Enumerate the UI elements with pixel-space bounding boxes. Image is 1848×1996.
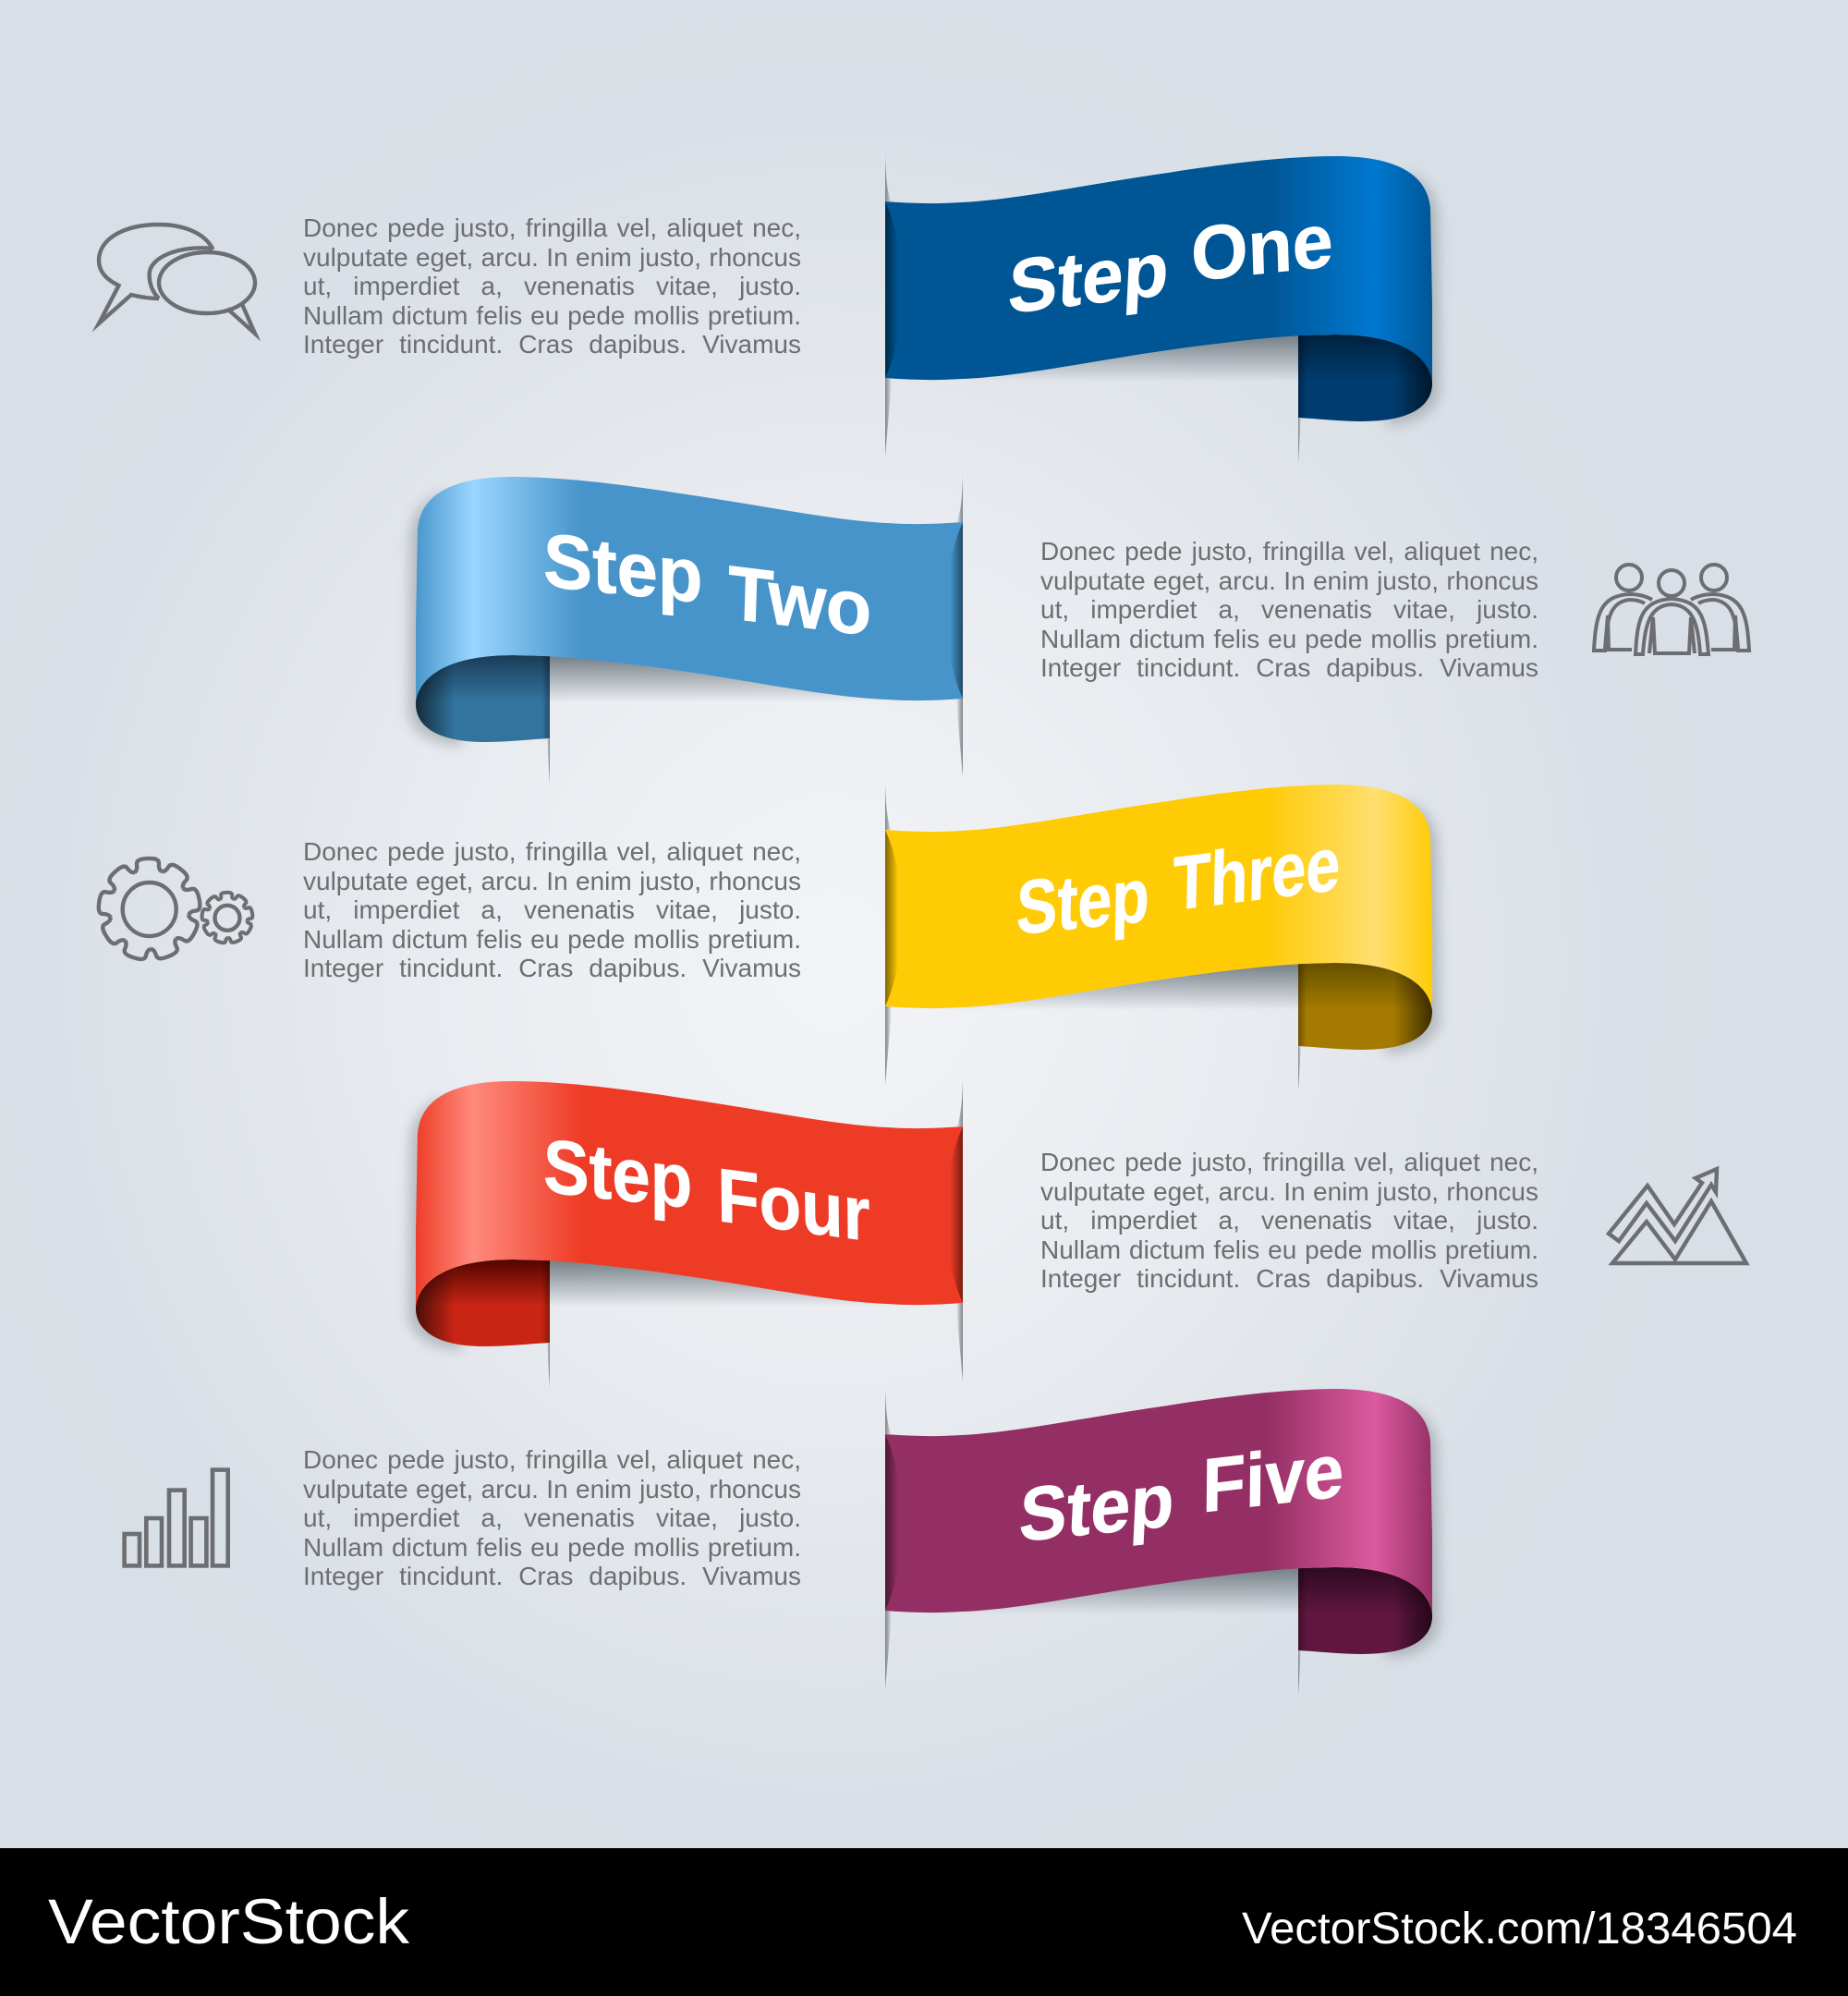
text block: step five: Nullam dictum felis eu pede mollis pretium.: [303, 1532, 801, 1562]
text block: step one: Integer tincidunt. Cras dapibus. Vivamus: [303, 330, 801, 359]
ribbon label: Step One: One: [1190, 198, 1334, 298]
text block: step one: Nullam dictum felis eu pede mollis pretium.: [303, 301, 801, 329]
text block: step four: ut, imperdiet a, venenatis vitae, justo.: [1040, 1206, 1538, 1235]
icon: gears: [97, 858, 253, 962]
icon: mountain chart with arrow: [1609, 1169, 1746, 1263]
text block: step two: Nullam dictum felis eu pede mollis pretium.: [1040, 625, 1538, 652]
text block: step one: vulputate eget, arcu. In enim justo, rhoncus: [303, 242, 801, 272]
text block: step five: Integer tincidunt. Cras dapibus. Vivamus: [303, 1562, 801, 1590]
icon: team of people: [1594, 565, 1749, 654]
text block: step four: Integer tincidunt. Cras dapibus. Vivamus: [1040, 1264, 1538, 1293]
text block: step three: Donec pede justo, fringilla vel, aliquet nec,: [303, 837, 801, 866]
footer bar: [0, 1848, 1848, 1996]
ribbon label: Step Three: Three: [1173, 821, 1341, 927]
text block: step five: vulputate eget, arcu. In enim justo, rhoncus: [303, 1475, 801, 1503]
text block: step five: ut, imperdiet a, venenatis vitae, justo.: [303, 1503, 801, 1532]
text block: step five: [303, 1445, 801, 1590]
ribbon label: Step Five: Step: [1017, 1457, 1176, 1557]
text block: step two: Donec pede justo, fringilla vel, aliquet nec,: [1040, 537, 1538, 566]
text block: step four: Nullam dictum felis eu pede mollis pretium.: [1040, 1235, 1538, 1264]
ribbon label: Step Four: Step: [543, 1123, 692, 1224]
icon: bar chart: [125, 1470, 228, 1565]
ribbon: step three: [885, 782, 1440, 1091]
text block: step four: [1040, 1148, 1538, 1293]
ribbon label: Step Four: Four: [717, 1152, 870, 1258]
ribbon label: Step Two: Step: [543, 517, 702, 619]
ribbon label: Step Three: Step: [1015, 852, 1150, 951]
text block: step four: Donec pede justo, fringilla vel, aliquet nec,: [1040, 1148, 1538, 1176]
footer url: VectorStock.com/18346504: [1242, 1905, 1797, 1953]
ribbon label: Step Two: Two: [726, 551, 873, 652]
text block: step two: vulputate eget, arcu. In enim justo, rhoncus: [1040, 566, 1538, 595]
ribbon label: Step One: Step: [1006, 226, 1171, 330]
footer brand: VectorStock: [48, 1886, 410, 1957]
ribbon label: Step Five: Five: [1202, 1427, 1344, 1528]
ribbon: step one: [885, 153, 1440, 463]
text block: step one: ut, imperdiet a, venenatis vitae, justo.: [303, 272, 801, 300]
ribbon label: Step Two: [543, 517, 873, 652]
text block: step four: vulputate eget, arcu. In enim justo, rhoncus: [1040, 1177, 1538, 1205]
ribbon label: Step One: [1006, 198, 1334, 330]
text block: step one: Donec pede justo, fringilla vel, aliquet nec,: [303, 213, 801, 242]
text block: step three: Nullam dictum felis eu pede mollis pretium.: [303, 924, 801, 954]
text block: step two: Integer tincidunt. Cras dapibus. Vivamus: [1040, 653, 1538, 682]
icon: speech bubbles: [99, 225, 255, 334]
text block: step three: Integer tincidunt. Cras dapibus. Vivamus: [303, 954, 801, 982]
ribbon: step two: [408, 474, 963, 784]
ribbon label: Step Five: [1017, 1427, 1344, 1557]
text block: step two: [1040, 537, 1538, 682]
text block: step one: [303, 213, 801, 359]
ribbon label: Step Three: [1015, 821, 1341, 951]
ribbon: step four: [408, 1078, 963, 1388]
text block: step two: ut, imperdiet a, venenatis vitae, justo.: [1040, 595, 1538, 624]
text block: step three: ut, imperdiet a, venenatis vitae, justo.: [303, 895, 801, 924]
text block: step three: vulputate eget, arcu. In enim justo, rhoncus: [303, 867, 801, 895]
ribbon: step five: [885, 1386, 1440, 1696]
ribbon label: Step Four: [543, 1123, 870, 1258]
text block: step five: Donec pede justo, fringilla vel, aliquet nec,: [303, 1445, 801, 1474]
text block: step three: [303, 837, 801, 982]
